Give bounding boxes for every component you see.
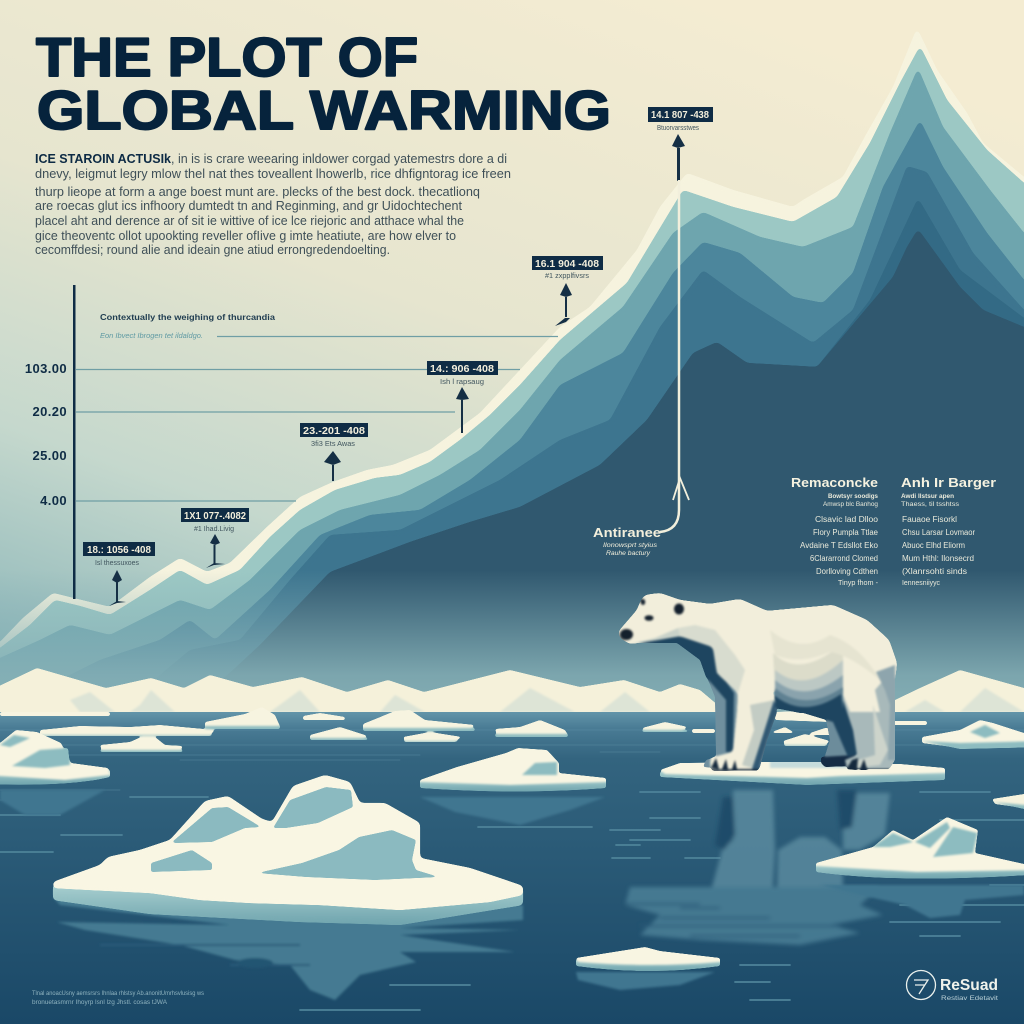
reflections under mid and small floes bbox=[0, 790, 1024, 990]
legend column: Remaconcke: Avdaine T Edsllot Eko bbox=[800, 541, 879, 550]
ears, eye and nose bbox=[674, 604, 684, 614]
background sky bbox=[0, 0, 1024, 720]
legend column: Anh Ir Barger: Thaess, til tsshtss bbox=[901, 501, 960, 508]
legend column: Anh Ir Barger: (Xlanrsohti sinds bbox=[902, 567, 967, 576]
data marker 4: 14.: 906 -408 bbox=[430, 364, 494, 375]
legend column: Remaconcke: Flory Pumpla Ttlae bbox=[813, 528, 879, 537]
data marker 5: #1 zxpplfivsrs bbox=[545, 273, 590, 280]
far front leg bbox=[702, 660, 738, 768]
near front paw claws bbox=[711, 758, 758, 770]
ice floe: mid bbox=[420, 748, 606, 792]
polar bear bbox=[618, 593, 897, 771]
legend column: Anh Ir Barger: Fauaoe Fisorkl bbox=[902, 515, 957, 524]
data marker 6 peak: 14.1 807 -438 bbox=[651, 110, 709, 121]
logo: ReSuad bbox=[940, 977, 998, 994]
data marker 1: 18.: 1056 -408 bbox=[87, 545, 151, 556]
data marker 2: #1 Ihad.Livig bbox=[194, 526, 234, 533]
axis labels: 103.00 bbox=[25, 361, 67, 376]
legend column: Anh Ir Barger: Abuoc Elhd Eliorm bbox=[902, 541, 965, 550]
axis labels: 20.20 bbox=[32, 404, 67, 419]
intro text block: cecomffdesi; round alie and ideain gne atiud errongredendoelting. bbox=[35, 243, 390, 257]
ice floe: right bbox=[816, 817, 1024, 879]
ice floe: far left bbox=[0, 730, 110, 785]
ice floe: right upper bbox=[922, 720, 1024, 749]
near front leg shading bbox=[742, 700, 775, 768]
legend column: Anh Ir Barger: Mum Hthl: Ilonsecrd bbox=[902, 554, 974, 563]
title bbox=[36, 26, 611, 141]
back shading bbox=[770, 630, 880, 680]
reflection under large floe bbox=[53, 897, 523, 1000]
legend column: Remaconcke: Dorlloving Cdthen bbox=[816, 567, 878, 576]
data marker 2: 1X1 077-.4082 bbox=[184, 511, 246, 522]
intro text block: dnevy, leigmut legry mlow thel nat thes toveallent lhowerlb, rice dhfigntorag ice freen bbox=[35, 167, 511, 181]
data marker 2 bbox=[181, 508, 249, 568]
data marker 5 bbox=[532, 256, 603, 326]
neck shading bbox=[678, 625, 745, 693]
hind leg bbox=[843, 660, 895, 768]
legend column: Remaconcke: Bowtsyr soodigs bbox=[828, 493, 878, 500]
sea bbox=[0, 712, 1024, 1024]
ice floe: small bottom bbox=[576, 947, 720, 971]
logo: Restiav Edetavit bbox=[941, 996, 998, 1002]
reflection of polar bear bbox=[625, 790, 890, 945]
data marker 1: Isl thessuxoes bbox=[95, 560, 139, 567]
title: GLOBAL WARMING bbox=[37, 79, 611, 141]
intro text block: ICE STAROIN ACTUSIk, in is is crare weearing inldower corgad yatemestrs dore a di bbox=[35, 152, 507, 166]
distant mountain range bbox=[0, 668, 1024, 714]
intro text block: placel aht and derence ar of sit ie wittive of ice lce riejoric and atthace whal the bbox=[35, 214, 464, 228]
legend column: Anh Ir Barger: Anh Ir Barger bbox=[901, 476, 996, 490]
legend column: Remaconcke: Remaconcke bbox=[791, 476, 878, 490]
chart subtitle: Eon Ibvect Ibrogen tet ildaldgo. bbox=[100, 331, 203, 340]
legend column: Remaconcke: Amwsp blc Banhog bbox=[823, 501, 878, 508]
axis labels bbox=[25, 361, 67, 508]
ice floe under polar bear bbox=[660, 762, 945, 785]
data marker 3: 3fi3 Ets Awas bbox=[311, 441, 356, 448]
data marker 5: 16.1 904 -408 bbox=[535, 259, 599, 270]
callout: Antiranee bbox=[593, 526, 661, 557]
logo bbox=[906, 970, 998, 1002]
callout: Antiranee: Ilonowsprt styius bbox=[603, 542, 658, 549]
data marker 1 bbox=[83, 542, 155, 606]
legend column: Remaconcke: 6Clararrond Clomed bbox=[810, 554, 878, 563]
white arrow line bbox=[660, 180, 689, 532]
legend column: Anh Ir Barger: Iennesniiyyc bbox=[902, 580, 940, 587]
intro text block: thurp lieope at form a ange boest munt are. plecks of the best dock. thecatlionq bbox=[35, 185, 480, 199]
belly fur bands bbox=[773, 643, 843, 687]
chart subtitle bbox=[100, 312, 275, 340]
body silhouette bbox=[618, 593, 897, 771]
axis labels: 25.00 bbox=[32, 448, 67, 463]
legend column: Remaconcke: Tinyp fhom - bbox=[838, 580, 879, 587]
legend column: Anh Ir Barger: Chsu Larsar Lovmaor bbox=[902, 528, 975, 537]
legend column: Remaconcke bbox=[791, 476, 879, 587]
data marker 6 peak bbox=[648, 107, 713, 181]
ice floe: right small bbox=[992, 794, 1024, 809]
far ice floes bbox=[0, 707, 927, 752]
legend column: Anh Ir Barger: Awdi Ilstsur apen bbox=[901, 493, 954, 500]
layered mountain area chart bbox=[0, 28, 1024, 760]
far hind paw bbox=[821, 755, 855, 767]
water streaks bbox=[0, 730, 1024, 1010]
intro text block: gice theoventc ollot upookting reveller ofIive g imte heatiute, are how elver to bbox=[35, 229, 456, 243]
footer note bbox=[32, 990, 205, 1006]
title: THE PLOT OF bbox=[36, 26, 418, 88]
data marker 3: 23.-201 -408 bbox=[303, 426, 365, 437]
data marker 4: Ish l rapsaug bbox=[440, 379, 484, 386]
axis labels: 4.00 bbox=[40, 493, 67, 508]
ice floe: large foreground bbox=[53, 775, 523, 925]
footer note: Tlnal anoacUsny aemsrsrs Ihnlaa rhlstsy Ab.anonitUmrhsvlusisg ws bbox=[32, 990, 205, 997]
legend column: Anh Ir Barger bbox=[901, 476, 996, 587]
chart axis and gridlines bbox=[73, 285, 558, 599]
muzzle shading bbox=[630, 628, 680, 644]
data marker 4 bbox=[427, 361, 498, 433]
data marker 3 bbox=[300, 423, 368, 481]
callout: Antiranee: Rauhe bactury bbox=[606, 550, 651, 557]
navy chest and belly bbox=[630, 636, 860, 757]
intro text block bbox=[35, 152, 511, 257]
chart subtitle: Contextually the weighing of thurcandia bbox=[100, 312, 275, 322]
footer note: bronuetasmrnr Ihoyrp lsnl lzg Jhstl. cosas tJWA bbox=[32, 999, 168, 1006]
intro text block: are roecas glut ics infhoory dumtedt tn and Reginming, and gr Uidochtechent bbox=[35, 199, 463, 213]
legend column: Remaconcke: Clsavic lad Dlloo bbox=[815, 515, 879, 524]
data marker 6 peak: Btuorvarsstwes bbox=[657, 125, 699, 132]
far hind leg bbox=[823, 715, 850, 762]
callout: Antiranee: Antiranee bbox=[593, 526, 661, 540]
